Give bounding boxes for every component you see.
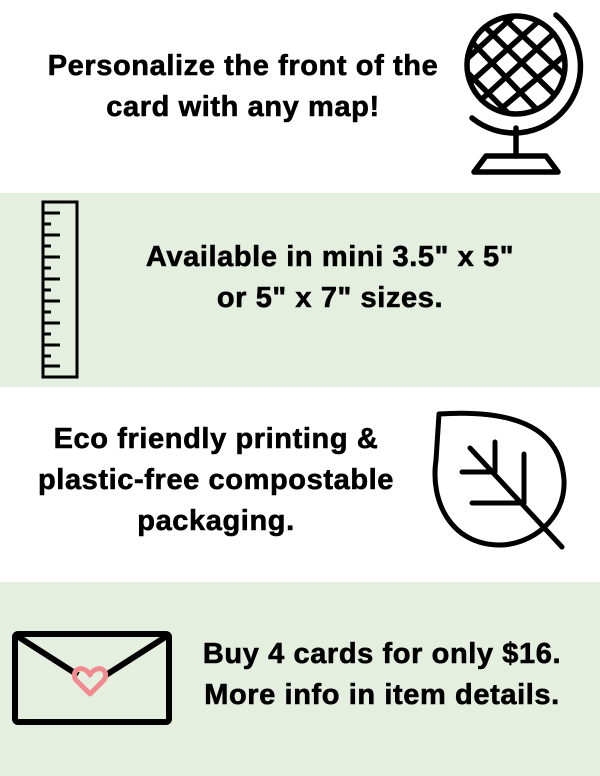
text: personalize: [48, 50, 438, 123]
text: price: [203, 638, 561, 711]
icon: leaf: [435, 413, 564, 547]
icon: globe: [455, 5, 580, 172]
icon: heart: [74, 669, 106, 694]
text: personalize: card with any map!: [106, 91, 380, 123]
text: price: More info in item details.: [204, 679, 560, 711]
text: eco: Eco friendly printing &: [54, 423, 378, 455]
text: sizes: [146, 241, 514, 314]
text: personalize: Personalize the front of the: [48, 50, 438, 82]
text: sizes: or 5" x 7" sizes.: [217, 282, 443, 314]
text: eco: [38, 423, 394, 537]
icon: envelope: [15, 634, 169, 722]
icon: ruler: [43, 202, 77, 377]
panel: envelope band: [0, 582, 600, 776]
panel: ruler band: [0, 193, 600, 387]
text: price: Buy 4 cards for only $16.: [203, 638, 561, 670]
text: eco: packaging.: [137, 505, 295, 537]
text: sizes: Available in mini 3.5" x 5": [146, 241, 514, 273]
text: eco: plastic-free compostable: [38, 464, 394, 496]
